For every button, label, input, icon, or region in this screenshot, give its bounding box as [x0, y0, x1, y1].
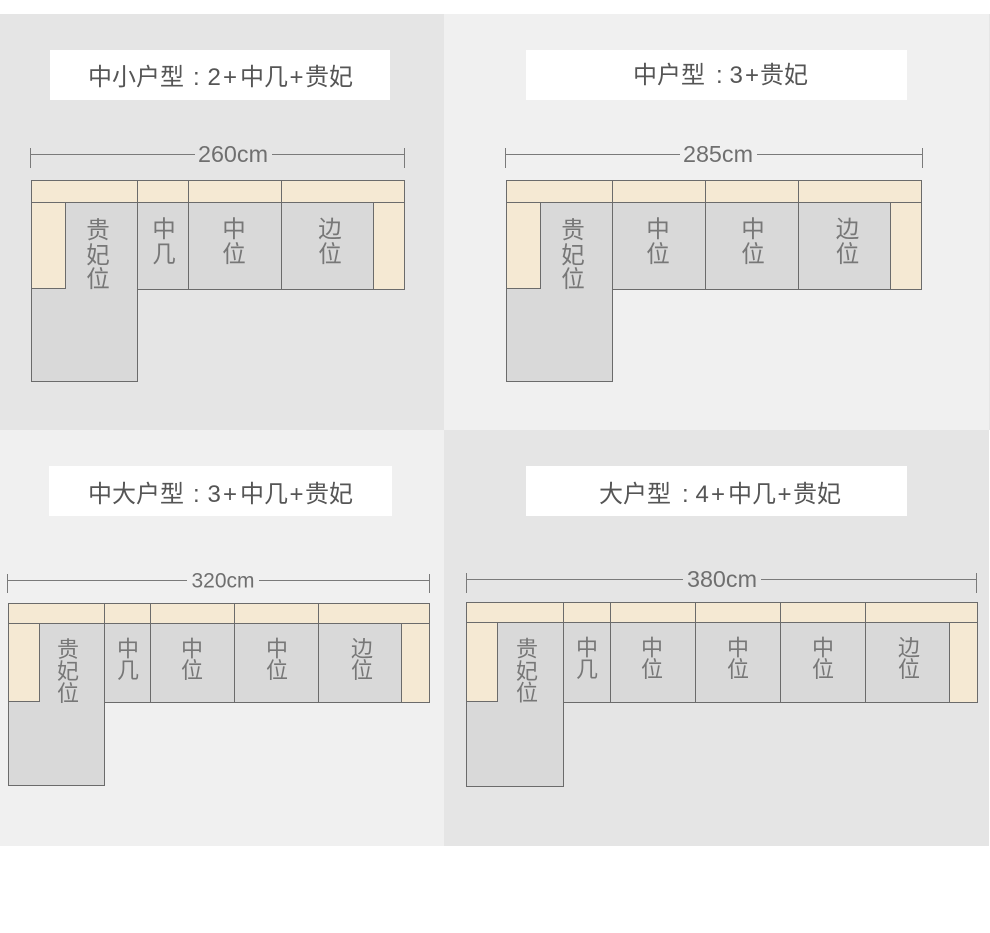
sofa diagram: 3 + chaise: 中 — [741, 216, 765, 242]
title box: medium-large home: 中几 — [240, 481, 288, 508]
title box: large home: 贵妃 — [793, 481, 841, 508]
title box: large home: + — [778, 481, 792, 508]
title box: medium-large home: 中大户型 — [88, 481, 184, 508]
title box: large home: 4 — [696, 481, 709, 508]
title box: medium-small home: 中小户型 — [88, 64, 184, 91]
sofa diagram: 2 + ottoman + chaise: 边 — [318, 216, 342, 242]
sofa diagram: 3 + chaise — [506, 180, 922, 382]
title box: medium home: 中户型 — [633, 62, 705, 89]
sofa diagram: 3 + chaise: 位 — [836, 241, 859, 267]
sofa diagram: 3 + chaise: 位 — [646, 241, 670, 267]
dimension: 320cm: 320cm — [192, 568, 254, 592]
panel: medium-small home — [0, 14, 444, 430]
sofa diagram: 4 + ottoman + chaise: 中 — [727, 636, 749, 660]
title box: medium-large home: 贵妃 — [305, 481, 353, 508]
sofa diagram: 3 + ottoman + chaise: 中 — [266, 636, 288, 662]
sofa diagram: 4 + ottoman + chaise: 妃 — [516, 659, 538, 684]
sofa diagram: 3 + ottoman + chaise: 中 — [181, 636, 203, 662]
panel: medium home — [444, 14, 990, 430]
sofa diagram: 3 + ottoman + chaise: 几 — [117, 658, 139, 683]
sofa diagram: 4 + ottoman + chaise: 位 — [727, 657, 749, 682]
title box: large home: 大户型 — [599, 481, 671, 508]
title box: medium-large home: : — [193, 481, 200, 508]
dimension: 380cm: 380cm — [687, 566, 757, 592]
title box: medium-small home: : — [193, 64, 200, 91]
sofa diagram: 3 + chaise: 位 — [561, 266, 585, 292]
panel: large home — [444, 430, 989, 846]
sofa diagram: 2 + ottoman + chaise: 中 — [152, 216, 176, 242]
title box: large home — [526, 466, 907, 516]
sofa diagram: 4 + ottoman + chaise: 位 — [641, 657, 663, 682]
title box: medium home: + — [745, 62, 759, 89]
sofa diagram: 4 + ottoman + chaise: 中 — [812, 636, 834, 660]
sofa diagram: 3 + ottoman + chaise: 中 — [117, 636, 139, 662]
title box: medium-small home: + — [223, 64, 237, 91]
sofa diagram: 4 + ottoman + chaise: 位 — [516, 680, 538, 706]
sofa diagram: 2 + ottoman + chaise: 位 — [222, 241, 246, 267]
sofa diagram: 3 + chaise: 中 — [646, 216, 670, 242]
sofa diagram: 4 + ottoman + chaise: 中 — [641, 636, 663, 660]
title box: medium-small home — [50, 50, 390, 100]
sofa diagram: 3 + chaise: 位 — [741, 241, 765, 267]
sofa diagram: 4 + ottoman + chaise: 中 — [576, 636, 598, 660]
sofa diagram: 4 + ottoman + chaise: 几 — [576, 657, 598, 682]
sofa diagram: 3 + chaise: 贵 — [561, 217, 585, 243]
sofa diagram: 3 + ottoman + chaise: 边 — [351, 636, 373, 662]
sofa diagram: 2 + ottoman + chaise — [32, 180, 404, 382]
title box: medium home: : — [716, 62, 723, 89]
title box: medium-large home: 3 — [208, 481, 221, 508]
sofa diagram: 4 + ottoman + chaise — [466, 602, 978, 786]
sofa diagram: 4 + ottoman + chaise: 位 — [898, 657, 920, 682]
sofa diagram: 3 + ottoman + chaise: 位 — [351, 658, 373, 683]
sofa diagram: 3 + ottoman + chaise: 妃 — [57, 659, 79, 684]
title box: large home: : — [682, 481, 689, 508]
sofa diagram: 2 + ottoman + chaise: 位 — [86, 266, 110, 292]
title box: medium-small home: 贵妃 — [305, 64, 353, 91]
sofa diagram: 2 + ottoman + chaise: 贵 — [86, 217, 110, 243]
sofa diagram: 3 + chaise: 边 — [836, 216, 859, 242]
sofa diagram: 4 + ottoman + chaise: 贵 — [516, 636, 538, 662]
dimension: 320cm — [8, 568, 430, 593]
sofa diagram: 3 + ottoman + chaise: 位 — [57, 681, 79, 706]
title box: medium-small home: + — [290, 64, 304, 91]
title box: medium-small home: 中几 — [240, 64, 288, 91]
title box: large home: 中几 — [728, 481, 776, 508]
title box: medium-large home: + — [290, 481, 304, 508]
sofa diagram: 4 + ottoman + chaise: 位 — [812, 657, 834, 682]
dimension: 380cm — [466, 566, 976, 593]
sofa diagram: 3 + ottoman + chaise: 位 — [266, 658, 288, 683]
title box: medium-small home: 2 — [208, 64, 221, 91]
title box: large home: + — [711, 481, 725, 508]
dimension: 285cm — [506, 141, 922, 168]
dimension: 260cm: 260cm — [198, 141, 268, 167]
sofa diagram: 4 + ottoman + chaise: 边 — [898, 636, 920, 660]
sofa diagram: 2 + ottoman + chaise: 几 — [152, 241, 176, 267]
sofa diagram: 3 + ottoman + chaise: 位 — [181, 658, 203, 683]
title box: medium home: 贵妃 — [760, 62, 808, 89]
sofa diagram: 3 + chaise: 妃 — [561, 242, 585, 268]
title box: medium-large home: + — [223, 481, 237, 508]
sofa diagram: 2 + ottoman + chaise: 妃 — [86, 242, 110, 268]
sofa diagram: 2 + ottoman + chaise: 中 — [222, 216, 246, 242]
sofa diagram: 2 + ottoman + chaise: 位 — [318, 241, 342, 267]
sofa diagram: 3 + ottoman + chaise: 贵 — [57, 637, 79, 662]
panel: medium-large home — [0, 430, 444, 846]
sofa diagram: 3 + ottoman + chaise — [8, 604, 430, 786]
dimension: 285cm: 285cm — [683, 141, 753, 167]
dimension: 260cm — [30, 141, 404, 168]
title box: medium-large home — [49, 466, 392, 516]
title box: medium home — [526, 50, 907, 100]
title box: medium home: 3 — [730, 62, 743, 89]
